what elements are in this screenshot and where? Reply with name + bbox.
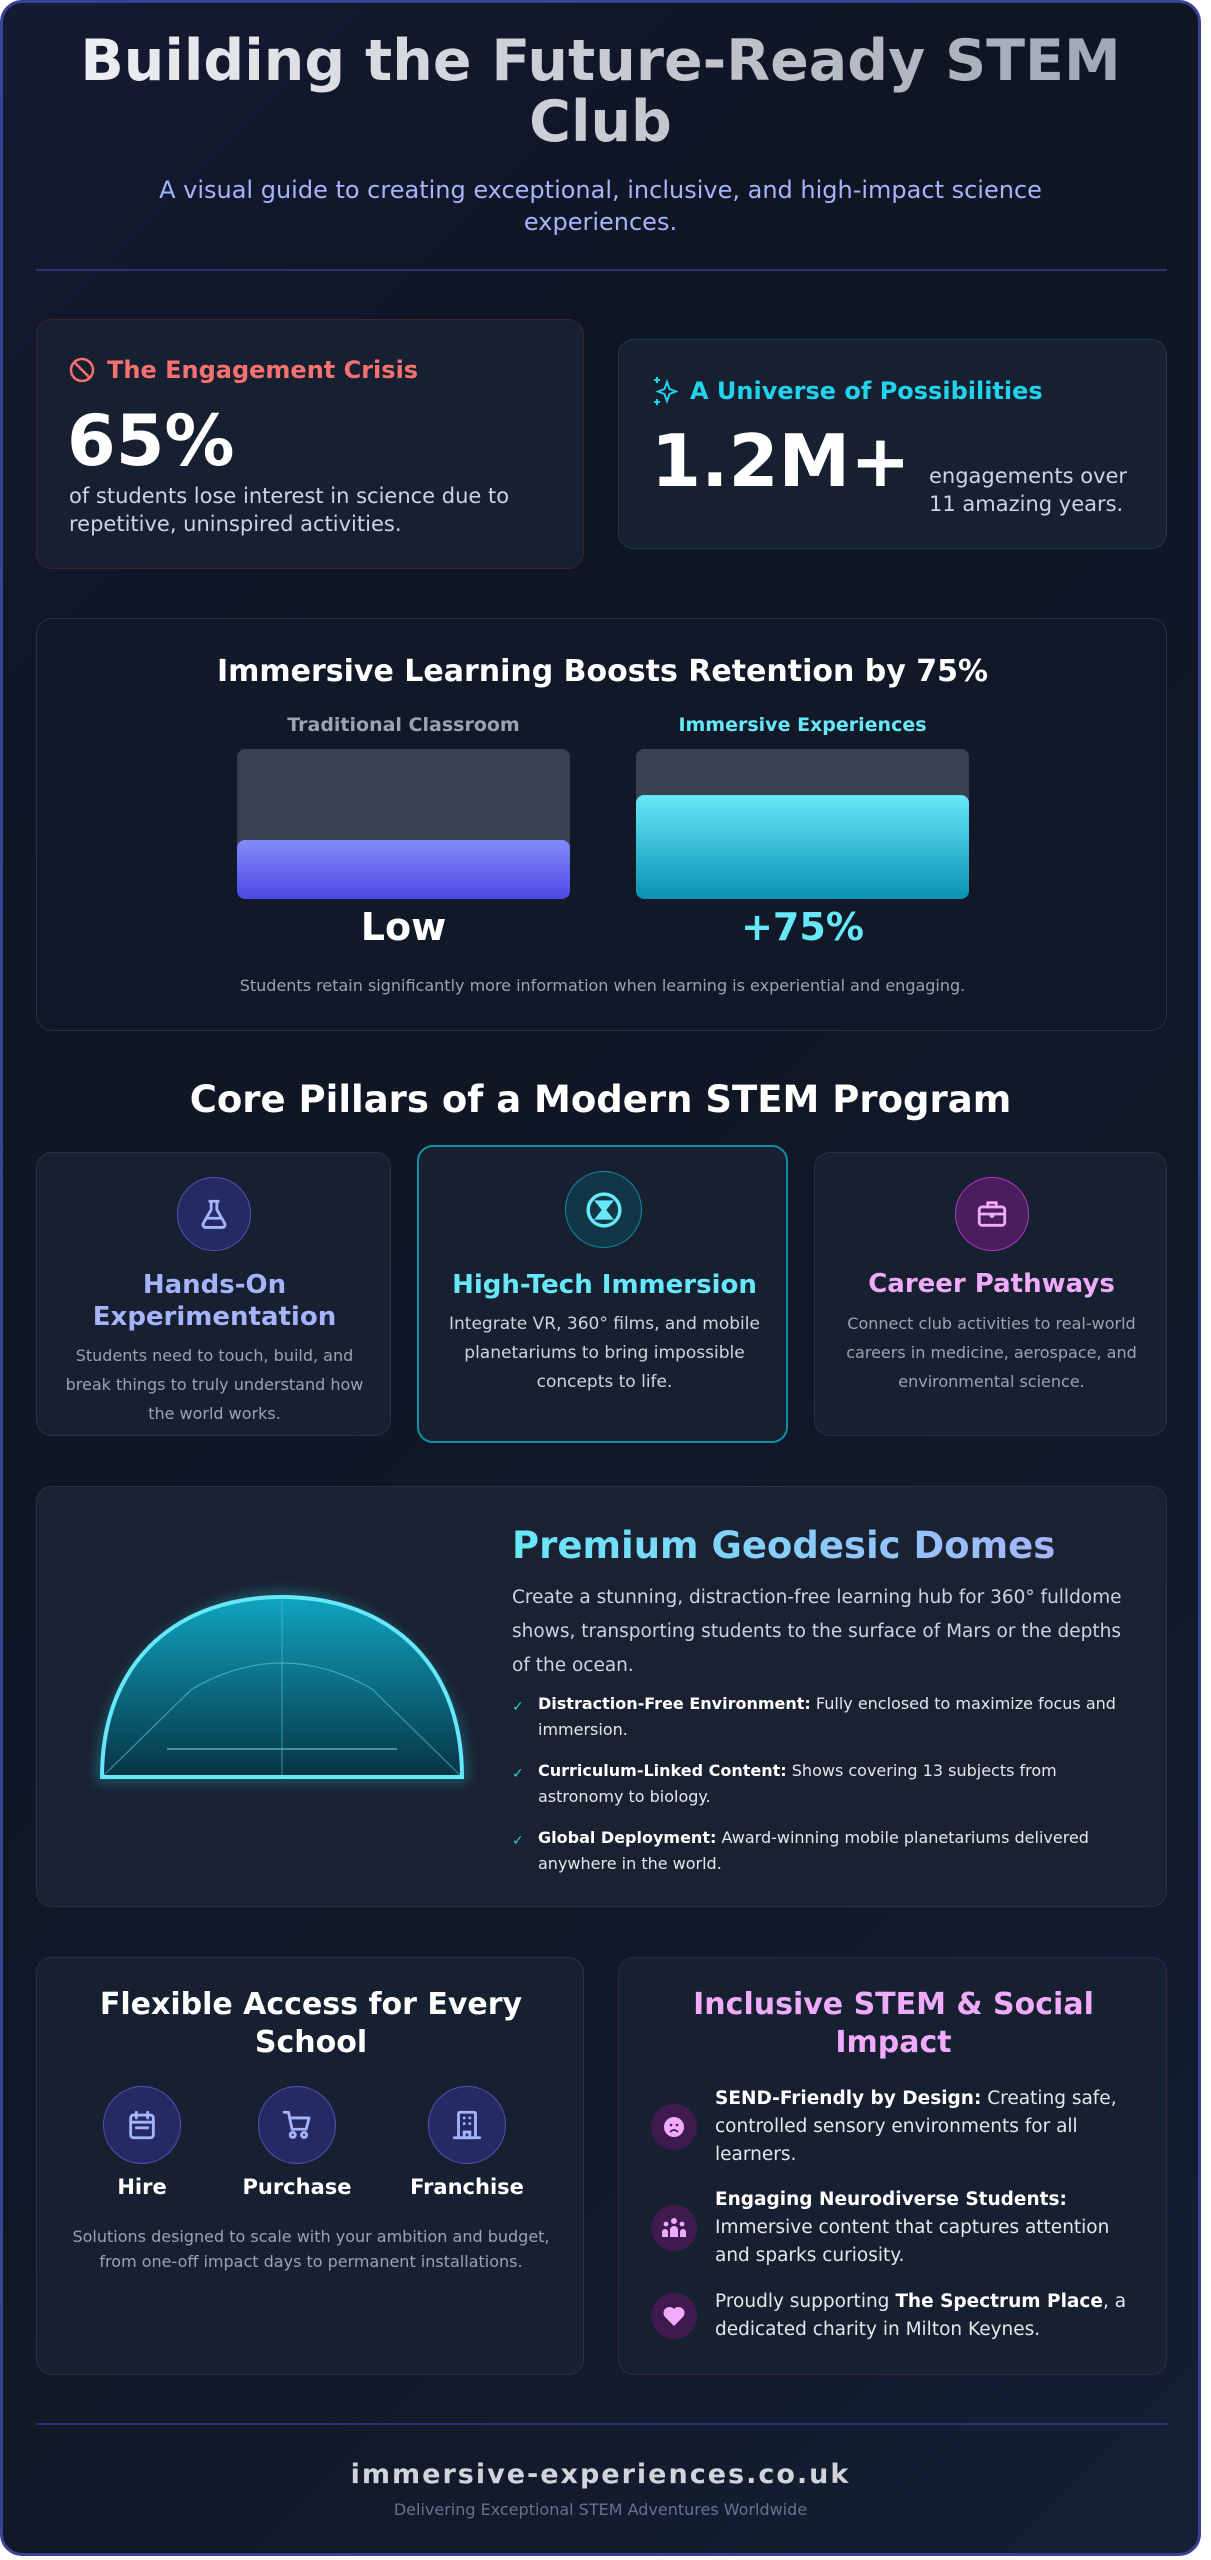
section heading: core pillars: Core Pillars of a Modern STEM Program (190, 1078, 1011, 1121)
text: engagements: engagements over 11 amazing years. (929, 464, 1127, 516)
panel: universe of possibilities (618, 339, 1167, 549)
subtitle: A visual guide to creating exceptional, inclusive, and high-impact science experiences. (159, 176, 1042, 236)
option: franchise: Franchise (410, 2175, 524, 2199)
option: purchase (242, 2086, 352, 2199)
bar: immersive experiences: +75% (741, 905, 864, 949)
caption: flexible access: Solutions designed to scale with your ambition and budget, from one-off impact days to permanent installations. (72, 2227, 550, 2271)
list: dome benefits: Distraction-Free Environment: Fully enclosed to maximize focus and immersion. (538, 1694, 1116, 1739)
chart caption: Students retain significantly more information when learning is experiential and engaging. (240, 976, 965, 995)
footer: tagline: Delivering Exceptional STEM Adventures Worldwide (394, 2500, 807, 2519)
panel: retention chart (36, 618, 1167, 1031)
pillar title (93, 1270, 336, 1332)
list: dome benefits: ✓ (512, 1833, 524, 1849)
pillar text: Students need to touch, build, and break things to truly understand how the world works. (66, 1346, 363, 1423)
text: crisis description: of students lose interest in science due to repetitive, uninspired activities. (69, 484, 509, 536)
pillar text: Connect club activities to real-world careers in medicine, aerospace, and environmental science. (846, 1314, 1137, 1391)
panel: hands-on experimentation (36, 1152, 391, 1436)
pillar text: Integrate VR, 360° films, and mobile planetariums to bring impossible concepts to life. (449, 1314, 760, 1392)
heading: inclusive stem (693, 1987, 1094, 2060)
bar: traditional classroom: Low (361, 905, 446, 949)
icon: briefcase (955, 1177, 1029, 1251)
heading: geodesic domes: Premium Geodesic Domes (512, 1524, 1055, 1567)
item: send-friendly: SEND-Friendly by Design: Creating safe, controlled sensory environments for all learners. (715, 2088, 1117, 2165)
stat: 1.2M+: 1.2M+ (651, 419, 911, 503)
panel: high-tech immersion (417, 1145, 788, 1443)
pillar title: Career Pathways (868, 1269, 1115, 1299)
panel: career pathways (814, 1152, 1167, 1436)
icon: vr (565, 1171, 642, 1248)
panel: engagement crisis (36, 319, 584, 569)
list: dome benefits: ✓ (512, 1699, 524, 1715)
heading: flexible access (100, 1987, 522, 2060)
option: hire: Hire (117, 2175, 167, 2199)
stat: 65%: 65% (67, 400, 235, 482)
list: dome benefits: Global Deployment: Award-winning mobile planetariums delivered anywhere in the world. (538, 1828, 1089, 1873)
item: neurodiverse: Engaging Neurodiverse Students: Immersive content that captures attention and sparks curiosity. (715, 2189, 1109, 2266)
bar: traditional classroom (237, 714, 570, 949)
heading: universe: A Universe of Possibilities (690, 377, 1043, 405)
pillar title: High-Tech Immersion (452, 1270, 757, 1300)
illustration: dome (91, 1586, 473, 1788)
panel: inclusive stem (618, 1957, 1167, 2375)
text: dome description: Create a stunning, distraction-free learning hub for 360° fulldome shows, transporting students to the surface of Mars or the depths of the ocean. (512, 1587, 1122, 1676)
footer: website: immersive-experiences.co.uk (351, 2459, 850, 2490)
bar: immersive experiences: Immersive Experiences (678, 714, 927, 736)
heading: inclusive stem: Inclusive STEM & Social (693, 1987, 1094, 2022)
bar: traditional classroom: Traditional Classroom (287, 714, 520, 736)
option: franchise (410, 2086, 524, 2199)
list: dome benefits (512, 1694, 1116, 1873)
list: dome benefits: ✓ (512, 1766, 524, 1782)
item: spectrum place: Proudly supporting The Spectrum Place, a dedicated charity in Milton Keynes. (715, 2291, 1126, 2340)
bar: immersive experiences (636, 714, 969, 949)
heading: flexible access: Flexible Access for Every (100, 1987, 522, 2022)
option: purchase: Purchase (242, 2175, 352, 2199)
heading: engagement crisis: The Engagement Crisis (107, 356, 418, 384)
heading: inclusive stem: Impact (835, 2025, 952, 2060)
list: dome benefits: Curriculum-Linked Content: Shows covering 13 subjects from astronomy to biology. (538, 1761, 1057, 1806)
pillar title: Hands-On (143, 1270, 286, 1300)
panel: flexible access (36, 1957, 584, 2375)
chart heading: Immersive Learning Boosts Retention by 75% (217, 654, 988, 689)
heading: flexible access: School (255, 2025, 367, 2060)
icon: flask (177, 1177, 251, 1251)
option: hire (103, 2086, 181, 2199)
panel: geodesic domes (36, 1486, 1167, 1907)
title: Building the Future-Ready STEM Club (80, 28, 1121, 155)
pillar title: Experimentation (93, 1302, 336, 1332)
